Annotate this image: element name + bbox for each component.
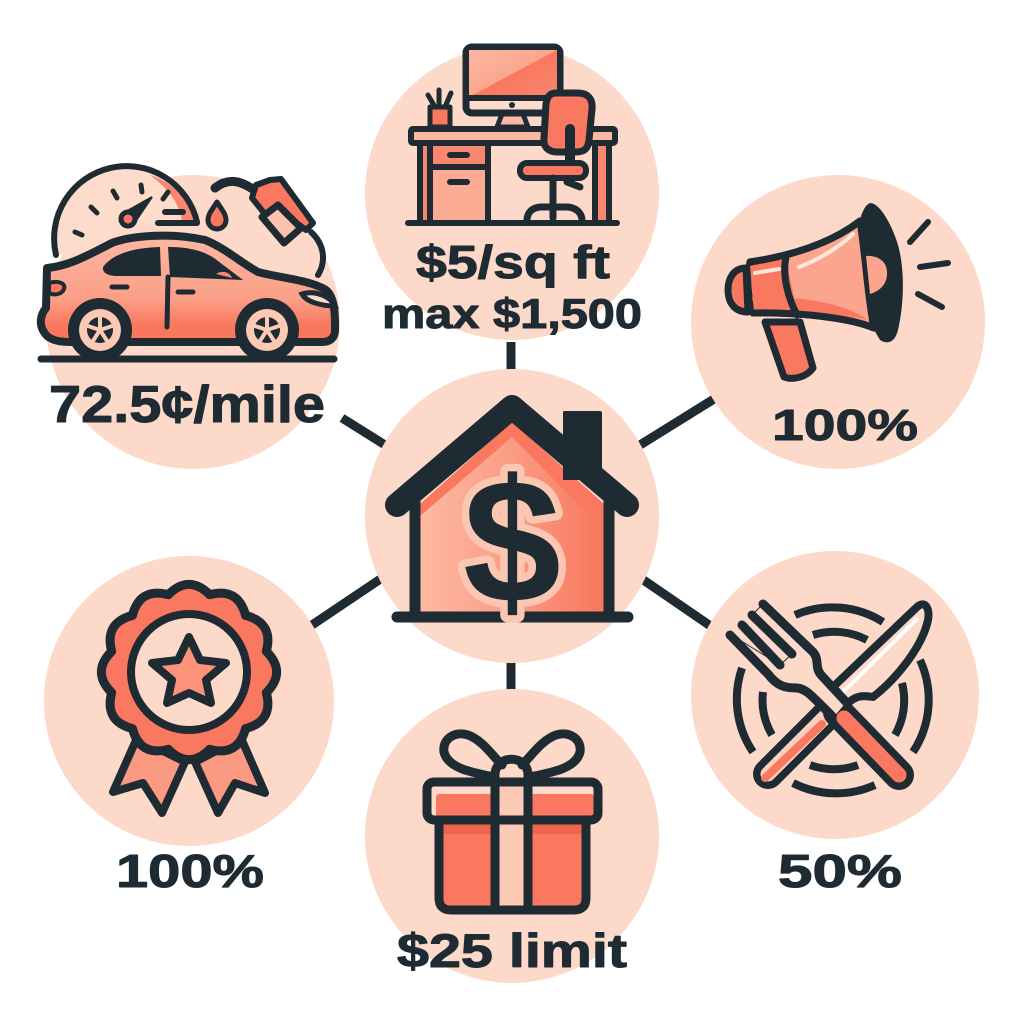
icon: rosette badge [101,584,277,760]
icon: gift [427,734,598,912]
icon: dollar sign: $ [463,444,561,640]
icon: fuel nozzle [215,179,323,275]
panel: gifts [365,689,659,983]
icon: fork [730,604,899,775]
panel: home office [365,46,659,340]
icon: plate [737,607,929,793]
text: home office rate [382,236,642,337]
text: advertising rate: 100% [772,401,918,450]
icon: knife [765,604,928,778]
icon: monitor [466,47,560,127]
text: awards rate: 100% [116,845,264,897]
panel: center home [365,369,659,663]
icon: house [397,407,628,617]
icon: desk [408,90,617,223]
icon: fuel drop [208,202,226,229]
text: meals rate: 50% [778,845,902,897]
panel: advertising [691,175,985,469]
panel: meals [691,551,979,897]
wheels [68,298,299,362]
icon: ribbon tails [113,738,265,813]
icon: megaphone [728,203,948,378]
text: mileage rate: 72.5¢/mile [49,376,325,434]
connector lines [312,342,714,702]
text: home office rate: max $1,500 [382,290,642,337]
panel: vehicle mileage [41,166,340,469]
text: gift limit: $25 limit [397,924,627,977]
icon: car [41,236,335,362]
icon: speedometer [54,166,197,255]
text: home office rate: $5/sq ft [416,236,610,288]
panel: awards [44,556,334,897]
icon: office chair [520,93,592,219]
